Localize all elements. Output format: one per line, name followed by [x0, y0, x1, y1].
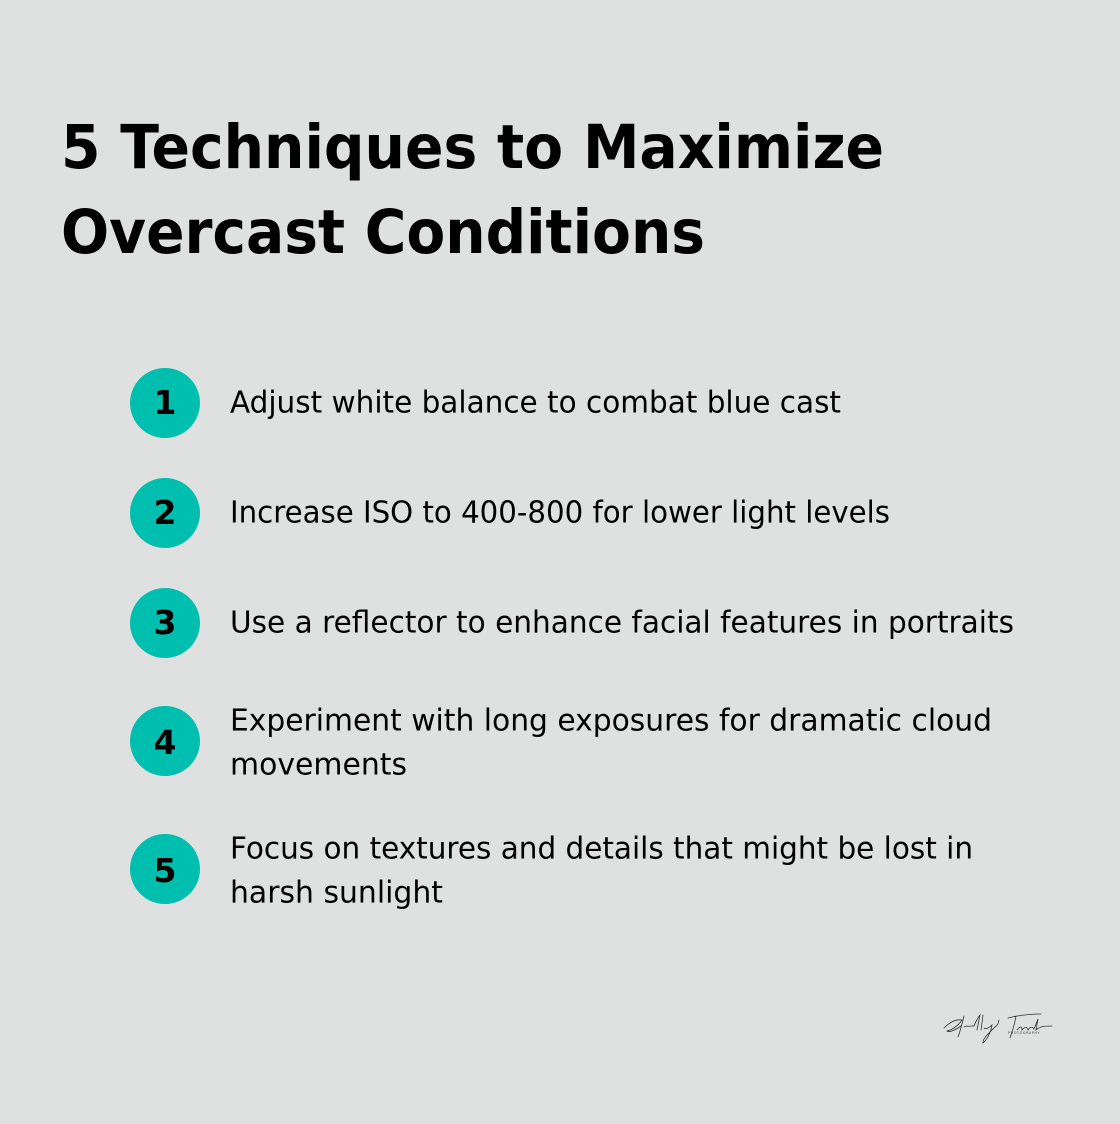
item 4 text: Experiment with long exposures for dramatic cloud	[230, 704, 992, 738]
item 5 text	[230, 832, 973, 910]
number badge 1: 1	[154, 383, 176, 422]
list item 4	[130, 704, 992, 782]
number badge 3: 3	[154, 603, 176, 642]
number badge 5	[130, 834, 200, 904]
title	[61, 112, 884, 268]
number badge 2	[130, 478, 200, 548]
list item 2	[130, 478, 890, 548]
item 5 text: Focus on textures and details that might be lost in	[230, 832, 973, 866]
item 4 text: movements	[230, 748, 407, 782]
number badge 2: 2	[154, 493, 176, 532]
number badge 1	[130, 368, 200, 438]
list item 1	[130, 368, 841, 438]
number badge 4	[130, 706, 200, 776]
item 4 text	[230, 704, 992, 782]
signature logo: PHOTOGRAPHY	[1008, 1031, 1041, 1035]
title: 5 Techniques to Maximize	[61, 112, 884, 183]
item 3 text: Use a reflector to enhance facial features in portraits	[230, 606, 1014, 640]
list item 3	[130, 588, 1014, 658]
number badge 5: 5	[154, 851, 176, 890]
title: Overcast Conditions	[61, 197, 705, 268]
signature logo	[944, 1014, 1052, 1043]
number badge 3	[130, 588, 200, 658]
item 5 text: harsh sunlight	[230, 876, 443, 910]
number badge 4: 4	[154, 723, 176, 762]
item 1 text: Adjust white balance to combat blue cast	[230, 386, 841, 420]
item 2 text: Increase ISO to 400-800 for lower light levels	[230, 496, 890, 530]
list item 5	[130, 832, 973, 910]
